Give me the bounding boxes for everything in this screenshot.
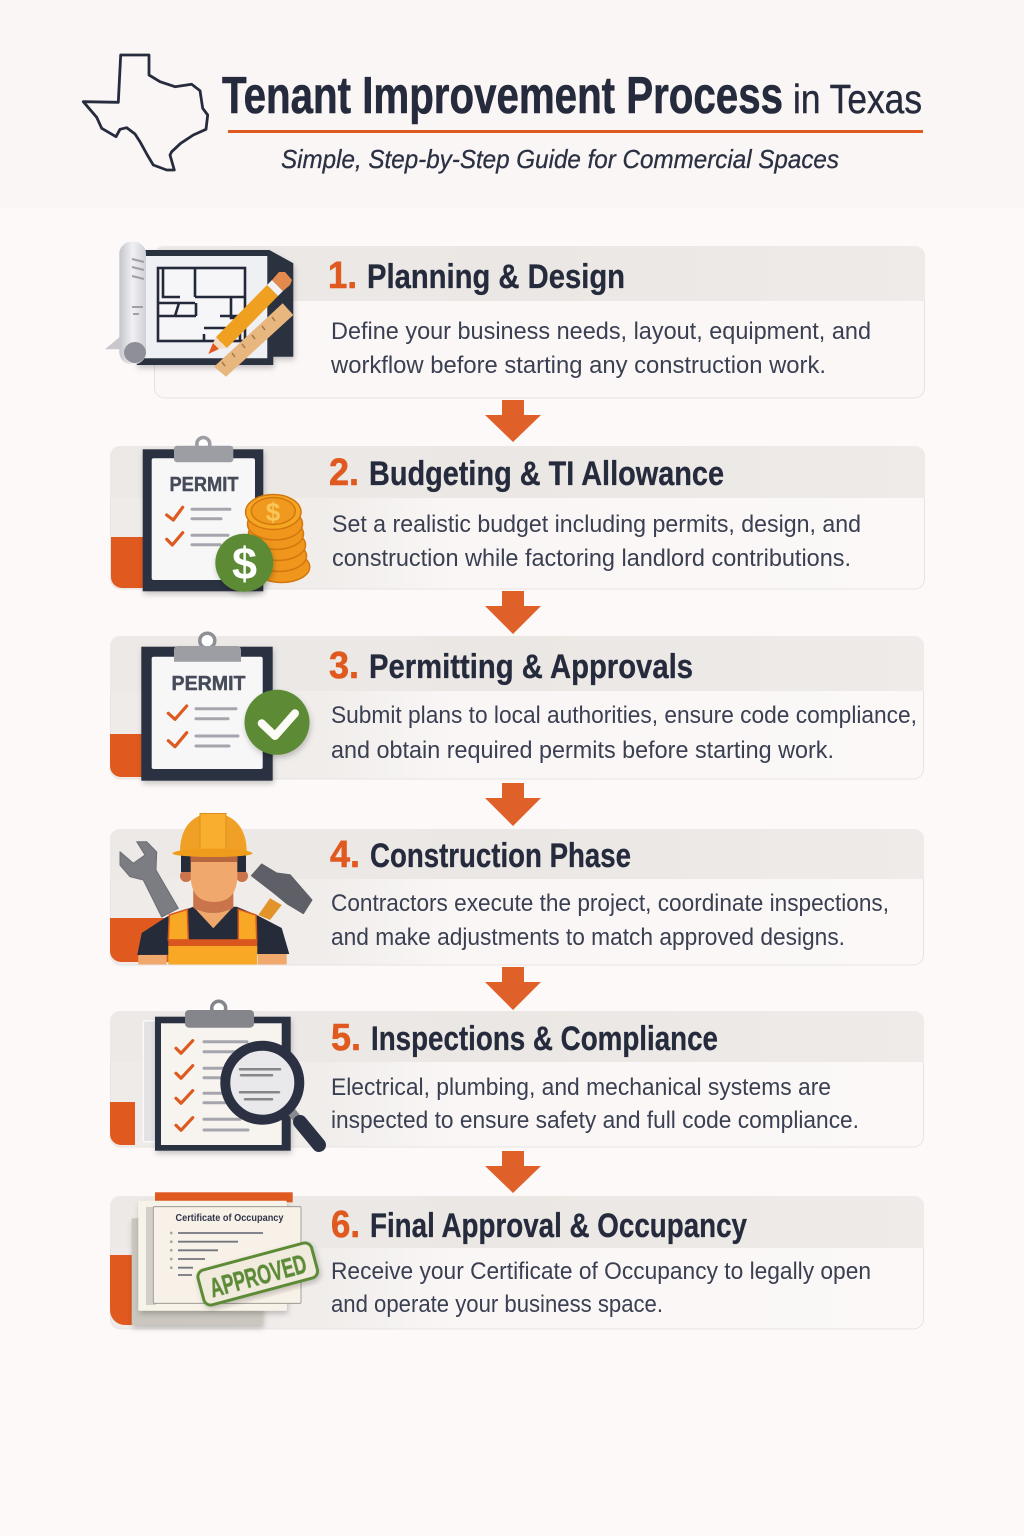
- step 2 header band: [110, 446, 925, 498]
- step 3 heading: 3.: [329, 645, 359, 687]
- icon: checklist with magnifying glass: [143, 1001, 319, 1151]
- step 2 description: construction while factoring landlord contributions.: [332, 545, 851, 572]
- icon: certificate of occupancy with approved stamp: APPROVED: [206, 1249, 310, 1303]
- step 1 heading: Planning & Design: [367, 258, 625, 296]
- header band: [0, 0, 1024, 208]
- panel: step 3 permitting: [110, 633, 924, 781]
- title underline: [228, 130, 923, 133]
- icon: permit clipboard with coins: $: [232, 538, 257, 589]
- step 4 heading: Construction Phase: [370, 837, 631, 875]
- step 6 description: [331, 1258, 871, 1318]
- step 2 description: [332, 511, 861, 572]
- step 2 heading: 2.: [329, 452, 359, 494]
- step 4 description: [331, 890, 889, 951]
- panel: step 2 budgeting: [110, 438, 925, 592]
- panel: step 6 final approval: [110, 1192, 924, 1329]
- step 1 heading: [328, 255, 625, 297]
- arrow 5 to 6: [485, 1151, 541, 1193]
- arrow 2 to 3: [485, 591, 541, 634]
- step 6 description: Receive your Certificate of Occupancy to legally open: [331, 1258, 871, 1285]
- icon: permit clipboard with green check: PERMIT: [172, 673, 246, 695]
- arrow 4 to 5: [485, 967, 541, 1010]
- step 5 header band: [110, 1011, 924, 1062]
- icon: blueprint with pencil and ruler: [105, 242, 293, 377]
- step 2 orange tab: [111, 537, 146, 588]
- step 5 description: Electrical, plumbing, and mechanical systems are: [331, 1074, 831, 1101]
- step 1 header band: [154, 246, 925, 301]
- step 4 description: Contractors execute the project, coordinate inspections,: [331, 890, 889, 917]
- step 5 description: inspected to ensure safety and full code compliance.: [331, 1107, 859, 1134]
- step 5 orange tab: [110, 1102, 135, 1145]
- step 6 heading: [331, 1204, 747, 1246]
- panel: step 1 planning and design: [105, 242, 925, 398]
- icon: certificate of occupancy with approved stamp: Certificate of Occupancy: [176, 1212, 284, 1224]
- title: in Texas: [793, 76, 922, 122]
- step 5 heading: 5.: [331, 1017, 361, 1059]
- icon: permit clipboard with coins: [143, 438, 310, 592]
- step 4 heading: 4.: [330, 834, 360, 876]
- step 4 header band: [110, 829, 924, 879]
- icon: certificate of occupancy with approved stamp: [132, 1192, 319, 1325]
- step 1 description: workflow before starting any construction work.: [330, 352, 826, 379]
- step 1 description: [330, 318, 871, 379]
- step 4 description: and make adjustments to match approved designs.: [331, 924, 845, 951]
- panel: step 4 construction: [110, 813, 924, 965]
- step 1 heading: 1.: [328, 255, 357, 297]
- icon: Texas outline: [83, 55, 208, 170]
- step 2 heading: Budgeting & TI Allowance: [369, 455, 724, 493]
- step 6 heading: Final Approval & Occupancy: [370, 1207, 747, 1245]
- step 4 heading: [330, 834, 631, 876]
- step 5 heading: [331, 1017, 718, 1059]
- panel: step 5 inspections: [110, 1001, 924, 1151]
- step 3 description: Submit plans to local authorities, ensure code compliance,: [331, 702, 917, 729]
- step 6 orange tab: [110, 1255, 140, 1325]
- icon: permit clipboard with coins: $: [266, 497, 281, 527]
- step 4 orange tab: [110, 918, 170, 962]
- icon: permit clipboard with green check: [141, 633, 310, 781]
- arrow 3 to 4: [485, 783, 541, 826]
- step 6 description: and operate your business space.: [331, 1291, 663, 1318]
- step 5 description: [331, 1074, 859, 1134]
- icon: construction worker with wrench and hammer: [120, 813, 312, 964]
- step 1 description: Define your business needs, layout, equipment, and: [331, 318, 871, 345]
- step 3 heading: Permitting & Approvals: [369, 648, 693, 686]
- step 3 description: [331, 702, 917, 764]
- step 3 orange tab: [110, 734, 144, 777]
- subtitle: Simple, Step-by-Step Guide for Commercial Spaces: [281, 144, 839, 174]
- arrow 1 to 2: [485, 400, 541, 442]
- step 6 heading: 6.: [331, 1204, 360, 1246]
- step 6 header band: [110, 1196, 924, 1248]
- step 3 header band: [110, 636, 924, 691]
- step 3 description: and obtain required permits before starting work.: [331, 737, 834, 764]
- title: Tenant Improvement Process: [222, 67, 783, 125]
- step 5 heading: Inspections & Compliance: [371, 1020, 718, 1058]
- step 2 description: Set a realistic budget including permits, design, and: [332, 511, 861, 538]
- icon: permit clipboard with coins: PERMIT: [170, 474, 238, 496]
